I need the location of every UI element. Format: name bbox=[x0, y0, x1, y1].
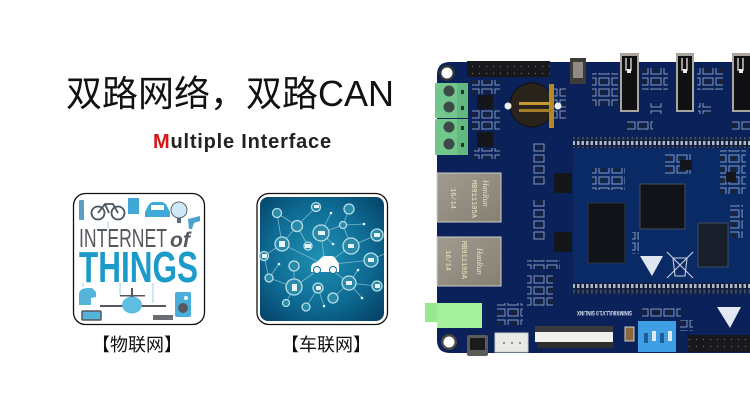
connector strip bottom bbox=[573, 283, 750, 294]
fpc connector bbox=[535, 326, 613, 348]
subtitle: Multiple Interface bbox=[153, 131, 332, 153]
mini usb bbox=[570, 58, 586, 84]
icon: things row bottom bbox=[79, 222, 191, 320]
ICs bbox=[477, 95, 736, 252]
ethernet port top bbox=[437, 173, 501, 222]
capacitor bbox=[625, 327, 634, 341]
panel: internet of things bbox=[74, 194, 204, 324]
network nodes bbox=[260, 202, 383, 311]
mounting hole top bbox=[439, 65, 455, 81]
recycle mark bbox=[667, 252, 693, 278]
icon: car bbox=[311, 256, 339, 274]
mounting hole bottom bbox=[441, 334, 457, 350]
ethernet port top: HanRun bbox=[481, 179, 490, 207]
ethernet port bottom: HanRun bbox=[475, 247, 484, 275]
heading: of: of bbox=[170, 229, 192, 252]
usb port 3 bbox=[732, 53, 750, 112]
white connector bbox=[495, 333, 528, 352]
ethernet port bottom: 16/14 bbox=[443, 250, 451, 271]
label: internet of things: 【物联网】 bbox=[92, 331, 182, 357]
gpio header top bbox=[467, 61, 550, 77]
label: vehicle network: 【车联网】 bbox=[281, 331, 371, 357]
panel: vehicle network bbox=[257, 194, 388, 324]
chip: nand flash bbox=[588, 203, 625, 263]
dip switch bbox=[638, 321, 676, 352]
heading: internet: INTERNET bbox=[79, 223, 167, 253]
chip: ddr memory bbox=[698, 223, 728, 267]
core module bbox=[573, 141, 750, 294]
ethernet port bottom: MB911105A bbox=[459, 241, 467, 280]
terminal block bottom bbox=[435, 119, 468, 155]
audio jack bbox=[425, 303, 482, 328]
connector strip top bbox=[573, 137, 750, 148]
silkscreen: SINIMX6ULLV1.0 SINLINX bbox=[577, 309, 632, 316]
network node details bbox=[262, 205, 380, 307]
circuit board bbox=[425, 53, 750, 356]
chip: processor bbox=[640, 184, 685, 229]
ethernet port bottom bbox=[437, 237, 501, 286]
ethernet port top: MB911105A bbox=[469, 180, 477, 219]
reset button bbox=[467, 335, 488, 356]
usb port 1 bbox=[620, 53, 639, 112]
smd components bbox=[472, 68, 750, 331]
logo triangle bbox=[640, 256, 663, 276]
heading: things: THINGS bbox=[79, 243, 198, 292]
usb port 2 bbox=[676, 53, 694, 112]
icon: things row top bbox=[79, 198, 200, 229]
title: 双路网络，双路CAN bbox=[66, 73, 394, 114]
lower header bbox=[688, 335, 750, 352]
ethernet port top: 16/14 bbox=[448, 188, 456, 209]
coin battery bbox=[504, 83, 562, 128]
logo triangle lower bbox=[717, 307, 741, 328]
network lines bbox=[264, 207, 384, 307]
terminal block top bbox=[435, 83, 468, 118]
